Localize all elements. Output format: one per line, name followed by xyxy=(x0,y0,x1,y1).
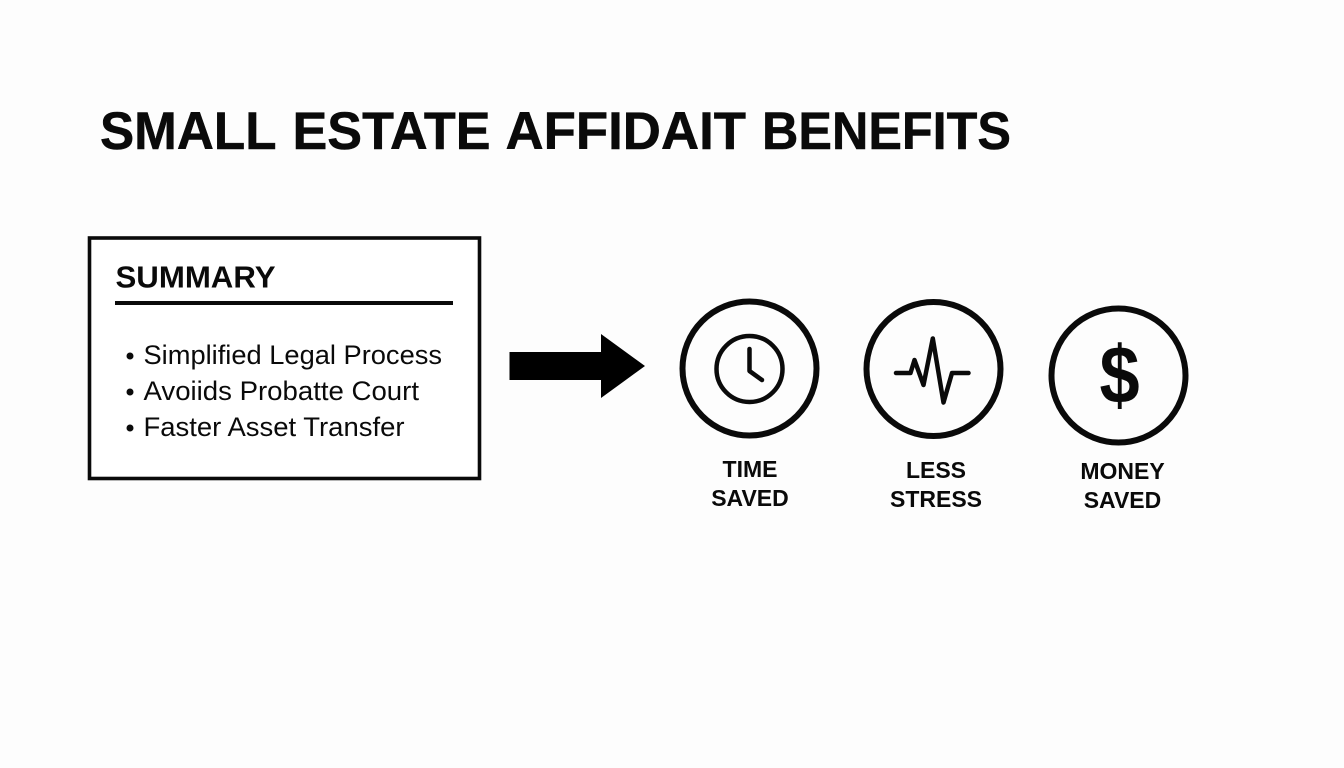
title: ESTATE xyxy=(292,102,490,161)
title xyxy=(100,102,1011,161)
label: less stress: LESS xyxy=(906,457,966,483)
bullet list xyxy=(126,340,442,442)
icon: clock xyxy=(682,302,816,436)
label: less stress: STRESS xyxy=(890,486,982,512)
bullet list: Avoiids Probatte Court xyxy=(144,376,419,406)
title: AFFIDAIT xyxy=(506,102,746,161)
benefit: less stress xyxy=(866,302,1000,512)
label: time saved: TIME xyxy=(723,456,777,482)
label: money saved: MONEY xyxy=(1080,458,1165,484)
summary heading: SUMMARY xyxy=(116,260,276,294)
icon: dollar: $ xyxy=(1099,330,1140,421)
benefit: money saved xyxy=(1052,308,1186,513)
bullet list: Faster Asset Transfer xyxy=(144,412,405,442)
icon: pulse xyxy=(866,302,1000,436)
title: SMALL xyxy=(100,102,276,161)
bullet list: Simplified Legal Process xyxy=(144,340,442,370)
label: time saved: SAVED xyxy=(711,485,789,511)
label: money saved: SAVED xyxy=(1084,487,1161,513)
icon: dollar xyxy=(1052,308,1186,442)
arrow xyxy=(510,334,645,398)
benefit: time saved xyxy=(682,302,816,511)
panel: summary xyxy=(90,238,480,478)
summary box border xyxy=(90,238,480,478)
title: BENEFITS xyxy=(762,102,1011,161)
